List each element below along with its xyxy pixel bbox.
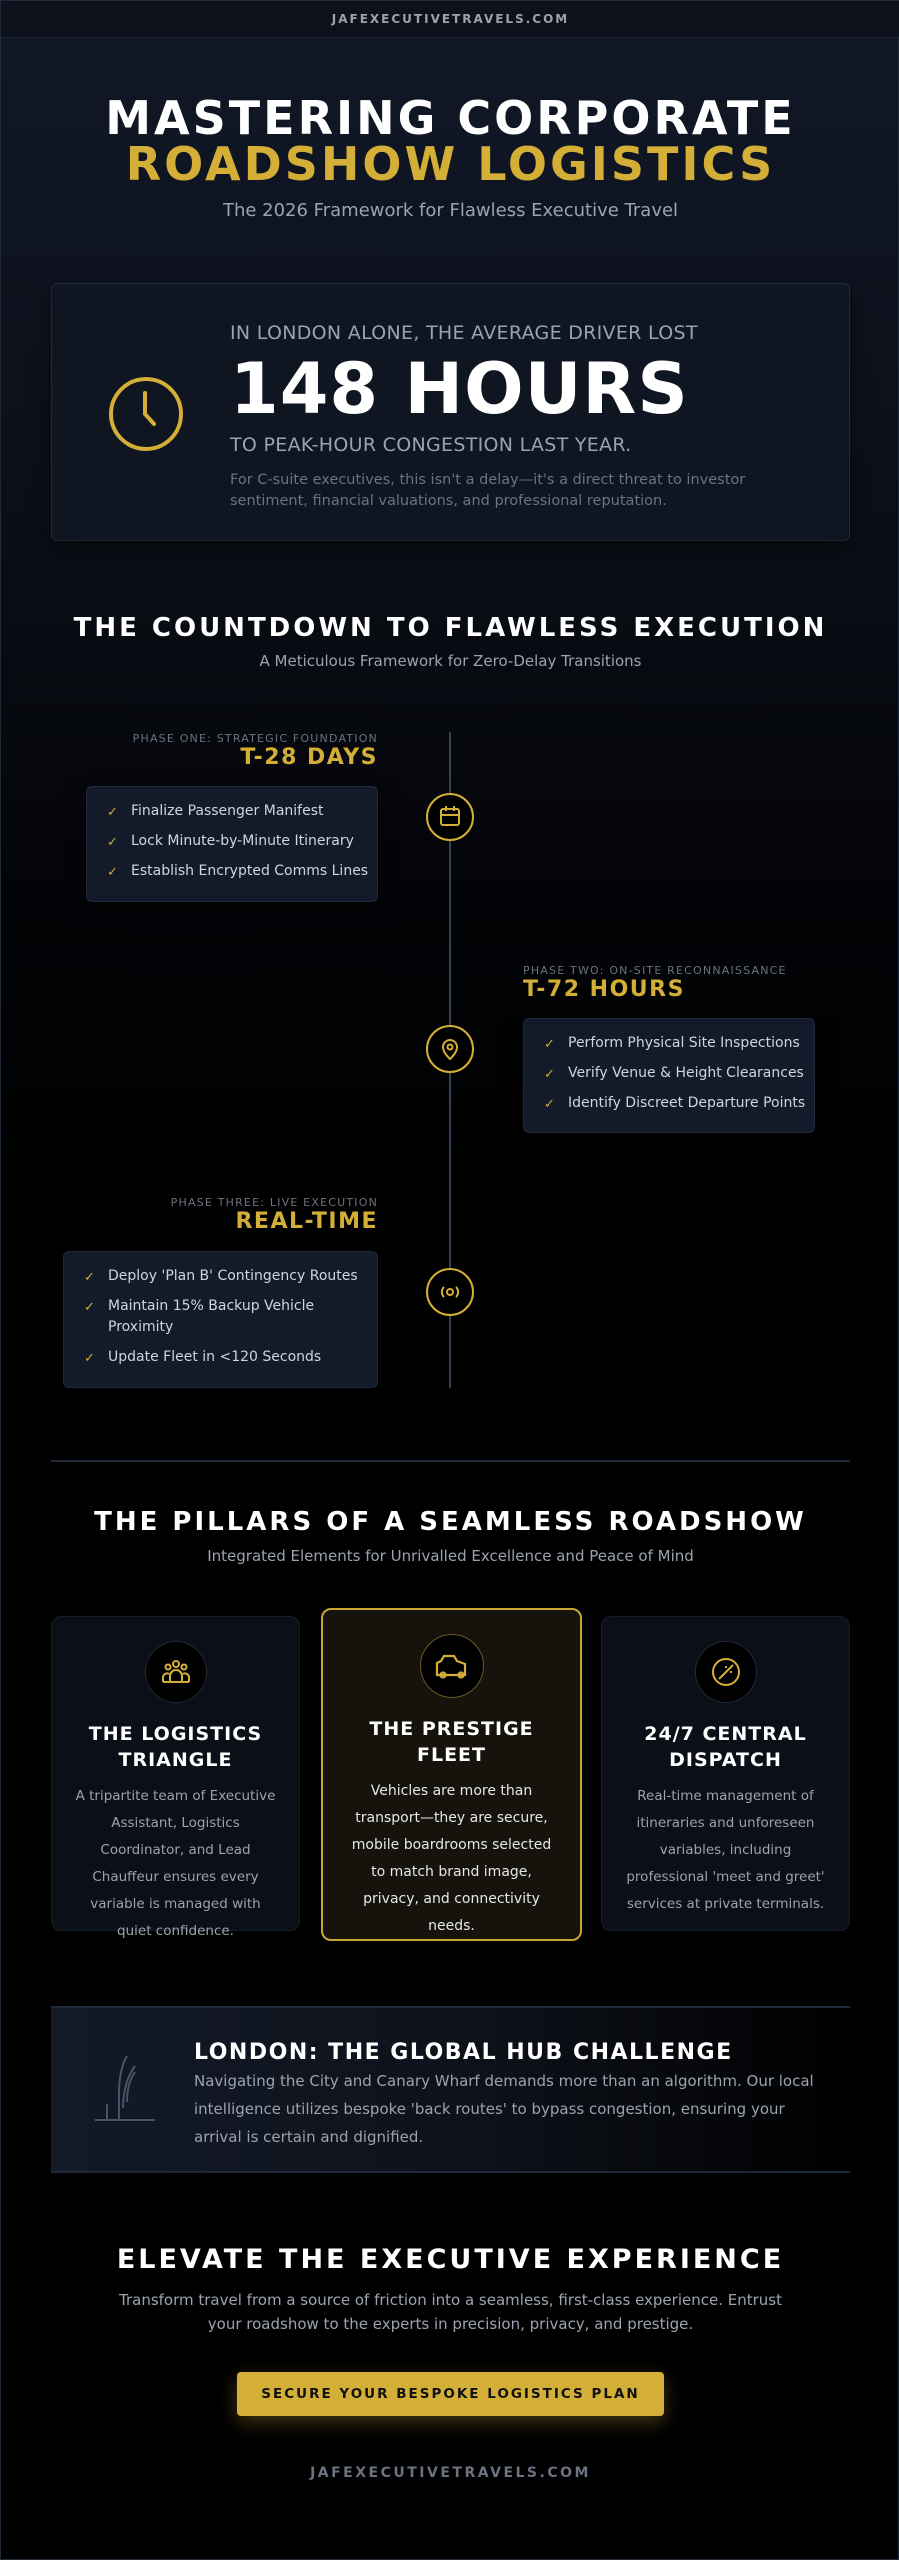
phase three label	[171, 1196, 378, 1234]
title	[105, 91, 796, 191]
cta button	[237, 2372, 664, 2416]
countdown subtitle: A Meticulous Framework for Zero-Delay Transitions	[260, 652, 641, 670]
phase one card	[86, 786, 378, 902]
pillar: logistics triangle: Coordinator, and Lead	[100, 1842, 251, 1858]
heading: elevate: ELEVATE THE EXECUTIVE EXPERIENCE	[117, 2244, 784, 2275]
phase three card	[63, 1251, 378, 1388]
pillar: logistics triangle	[51, 1616, 300, 1931]
phase two card: Verify Venue & Height Clearances	[568, 1065, 804, 1081]
pillar: prestige fleet: needs.	[428, 1918, 475, 1934]
icon: map pin	[426, 1025, 474, 1073]
pillar: central dispatch: Real-time management of	[637, 1788, 814, 1804]
pillar: prestige fleet: FLEET	[417, 1744, 486, 1766]
pillar: central dispatch: services at private terminals.	[627, 1896, 824, 1912]
stat text: 148 HOURS	[230, 348, 689, 430]
icon: broadcast	[426, 1268, 474, 1316]
pillars subtitle: Integrated Elements for Unrivalled Excellence and Peace of Mind	[207, 1547, 694, 1565]
phase two card	[523, 1018, 815, 1133]
cta button: SECURE YOUR BESPOKE LOGISTICS PLAN	[261, 2386, 640, 2402]
stat text: TO PEAK-HOUR CONGESTION LAST YEAR.	[230, 434, 632, 456]
pillar: logistics triangle: variable is managed with	[90, 1896, 261, 1912]
stat text	[230, 322, 746, 509]
heading: pillars: THE PILLARS OF A SEAMLESS ROADSHOW	[94, 1507, 807, 1537]
pillar: central dispatch: professional 'meet and greet'	[626, 1869, 825, 1885]
phase two label: PHASE TWO: ON-SITE RECONNAISSANCE	[523, 964, 787, 977]
pillar: central dispatch: 24/7 CENTRAL	[644, 1723, 807, 1745]
pillar: central dispatch: variables, including	[660, 1842, 791, 1858]
london text: Navigating the City and Canary Wharf demands more than an algorithm. Our local intelligence utilizes bespoke 'back routes' to bypass congestion, ensuring your arrival is certain and dignified.	[194, 2072, 814, 2146]
phase three card: Update Fleet in <120 Seconds	[108, 1349, 321, 1365]
elevate text: Transform travel from a source of friction into a seamless, first-class experience. Entrust your roadshow to the experts in precision, privacy, and prestige.	[119, 2291, 782, 2333]
footer: JAFEXECUTIVETRAVELS.COM	[310, 2465, 591, 2481]
icon: calendar	[426, 793, 474, 841]
london text	[194, 2040, 814, 2146]
stat text: For C-suite executives, this isn't a delay—it's a direct threat to investor sentiment, financial valuations, and professional reputation.	[230, 472, 745, 509]
pillar: central dispatch: itineraries and unforeseen	[636, 1815, 814, 1831]
pillar: prestige fleet: THE PRESTIGE	[369, 1718, 534, 1740]
london text: LONDON: THE GLOBAL HUB CHALLENGE	[194, 2040, 733, 2065]
phase one card: Establish Encrypted Comms Lines	[131, 863, 368, 879]
icon: clock	[109, 377, 183, 451]
pillar: prestige fleet: transport—they are secure,	[355, 1810, 548, 1826]
phase three label: REAL-TIME	[235, 1209, 378, 1234]
pillar: prestige fleet: to match brand image,	[371, 1864, 532, 1880]
phase one card: Lock Minute-by-Minute Itinerary	[131, 833, 354, 849]
pillar: prestige fleet: Vehicles are more than	[371, 1783, 532, 1799]
pillar: logistics triangle: A tripartite team of Executive	[76, 1788, 275, 1804]
stat text: IN LONDON ALONE, THE AVERAGE DRIVER LOST	[230, 322, 698, 344]
phase three label: PHASE THREE: LIVE EXECUTION	[171, 1196, 378, 1209]
pillar: prestige fleet: mobile boardrooms selected	[352, 1837, 551, 1853]
phase two label: T-72 HOURS	[523, 977, 685, 1002]
phase two card: Identify Discreet Departure Points	[568, 1095, 805, 1111]
phase one label: T-28 DAYS	[240, 745, 378, 770]
pillar: logistics triangle: THE LOGISTICS	[89, 1723, 262, 1745]
icon: vehicle	[420, 1634, 484, 1698]
panel: london hub challenge	[51, 2006, 850, 2173]
phase one label	[133, 732, 378, 770]
title: ROADSHOW LOGISTICS	[126, 137, 775, 191]
pillar: central dispatch: DISPATCH	[669, 1749, 782, 1771]
pillar: logistics triangle: quiet confidence.	[117, 1923, 234, 1939]
phase three card: Maintain 15% Backup Vehicle Proximity	[108, 1298, 314, 1335]
heading: countdown: THE COUNTDOWN TO FLAWLESS EXECUTION	[74, 613, 827, 643]
phase three card: Deploy 'Plan B' Contingency Routes	[108, 1268, 358, 1284]
subtitle: The 2026 Framework for Flawless Executive Travel	[223, 200, 678, 221]
icon: team	[144, 1641, 206, 1703]
icon: skyline	[95, 2056, 155, 2121]
phase two card: Perform Physical Site Inspections	[568, 1035, 800, 1051]
top bar: JAFEXECUTIVETRAVELS.COM	[332, 12, 569, 26]
top bar	[1, 1, 899, 38]
pillar: central dispatch	[601, 1616, 850, 1931]
stat card	[51, 283, 850, 541]
title: MASTERING CORPORATE	[105, 91, 796, 145]
pillar: prestige fleet	[321, 1608, 582, 1941]
pillar: prestige fleet: privacy, and connectivity	[363, 1891, 540, 1907]
phase one card: Finalize Passenger Manifest	[131, 803, 324, 819]
phase two label	[523, 964, 787, 1002]
icon: dispatch dial	[694, 1641, 756, 1703]
pillar: logistics triangle: Assistant, Logistics	[111, 1815, 240, 1831]
pillar: logistics triangle: Chauffeur ensures every	[92, 1869, 259, 1885]
pillar: logistics triangle: TRIANGLE	[119, 1749, 232, 1771]
phase one label: PHASE ONE: STRATEGIC FOUNDATION	[133, 732, 378, 745]
